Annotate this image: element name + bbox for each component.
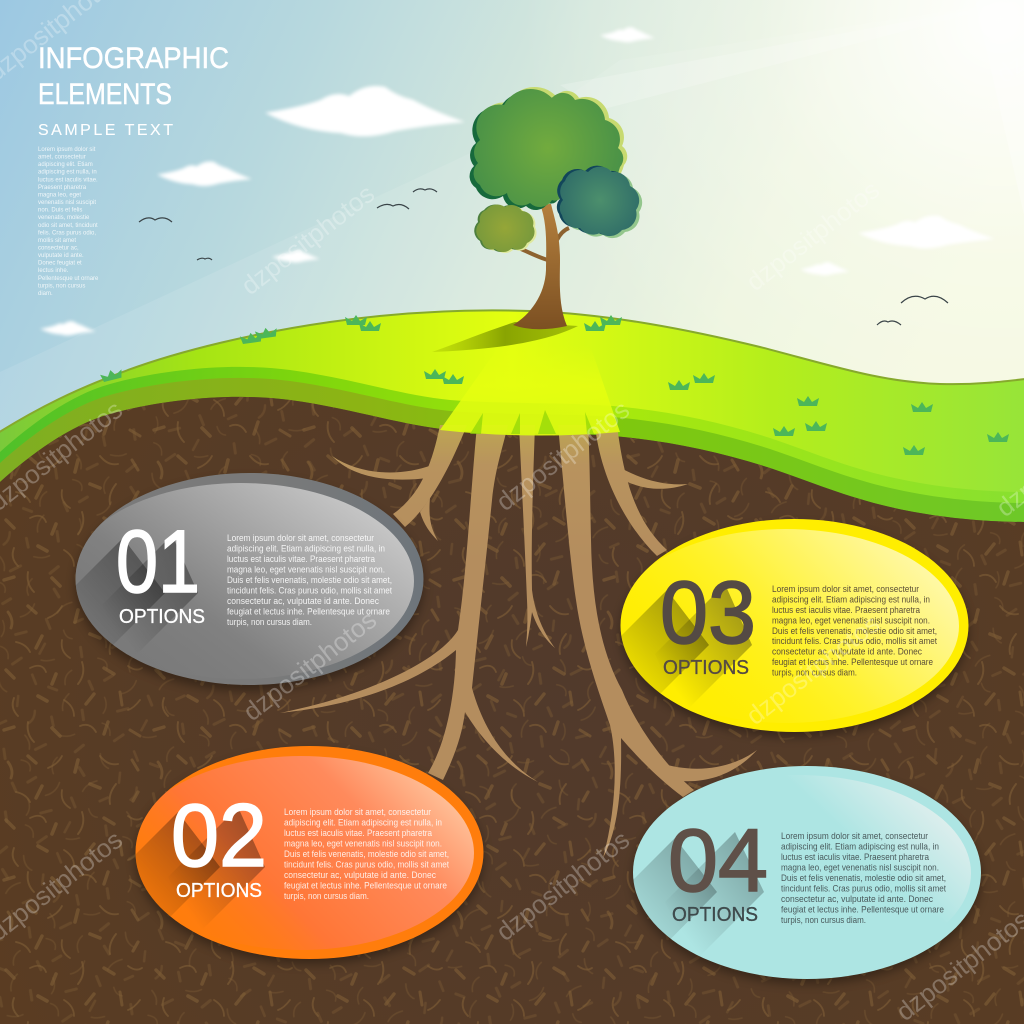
text 04: turpis, non cursus diam. <box>781 915 866 925</box>
text 01: consectetur ac, vulputate id ante. Donec <box>227 596 380 606</box>
sky paragraph: non. Duis et felis <box>38 208 82 214</box>
text 02: tincidunt felis. Cras purus odio, mollis sit amet <box>284 860 450 870</box>
text 03: feugiat et lectus inhe. Pellentesque ut ornare <box>772 657 933 667</box>
text 04: tincidunt felis. Cras purus odio, mollis sit amet <box>781 884 947 894</box>
text 03: tincidunt felis. Cras purus odio, mollis sit amet <box>772 636 938 646</box>
text 01: adipiscing elit. Etiam adipiscing est nulla, in <box>227 544 385 554</box>
text 04: luctus est iaculis vitae. Praesent pharetra <box>781 852 929 862</box>
label options 02: OPTIONS <box>176 880 262 902</box>
text 02: adipiscing elit. Etiam adipiscing est nulla, in <box>284 818 442 828</box>
sky paragraph: consectetur ac, <box>38 246 79 252</box>
text 04: adipiscing elit. Etiam adipiscing est nulla, in <box>781 842 939 852</box>
text 03: consectetur ac, vulputate id ante. Donec <box>772 647 923 657</box>
text 03: Duis et felis venenatis, molestie odio sit amet, <box>772 626 937 636</box>
sky paragraph: vulputate id ante. <box>38 253 84 259</box>
sky paragraph: Donec feugiat et <box>38 261 82 267</box>
text 03: magna leo, eget venenatis nisl suscipit non. <box>772 615 930 625</box>
sky paragraph: venenatis, molestie <box>38 215 90 221</box>
trunk and branches <box>513 204 569 329</box>
text 03: luctus est iaculis vitae. Praesent pharetra <box>772 605 920 615</box>
sky paragraph: lectus inhe. <box>38 268 69 274</box>
text 02: magna leo, eget venenatis nisl suscipit non. <box>284 838 442 848</box>
root: right main <box>558 425 757 858</box>
text 03: Lorem ipsum dolor sit amet, consectetur <box>772 584 919 594</box>
label options 04: OPTIONS <box>672 904 758 926</box>
sky paragraph: magna leo, eget <box>38 192 81 198</box>
text 03: adipiscing elit. Etiam adipiscing est nulla, in <box>772 594 930 604</box>
sky paragraph: luctus est iaculis vitae. <box>38 177 98 183</box>
text 03: turpis, non cursus diam. <box>772 667 857 677</box>
text 01: tincidunt felis. Cras purus odio, mollis sit amet <box>227 586 393 596</box>
text 03 <box>772 584 938 677</box>
olive crown <box>474 205 537 253</box>
root: left main <box>280 425 538 782</box>
tree shadow <box>432 322 578 352</box>
sky paragraph: diam. <box>38 291 53 297</box>
text 04 <box>781 831 947 925</box>
grass tufts <box>100 315 1009 455</box>
watermarks: dzpositphotos <box>490 824 635 947</box>
text 04: Lorem ipsum dolor sit amet, consectetur <box>781 831 928 841</box>
label options 01: OPTIONS <box>119 606 205 628</box>
sky paragraph: Pellentesque ut ornare <box>38 276 99 282</box>
text 01: Lorem ipsum dolor sit amet, consectetur <box>227 533 374 543</box>
option 03 panel <box>597 519 968 737</box>
sky paragraph: odio sit amet, tincidunt <box>38 223 98 229</box>
text 02: Duis et felis venenatis, molestie odio sit amet, <box>284 849 449 859</box>
text 01: feugiat et lectus inhe. Pellentesque ut ornare <box>227 606 390 616</box>
watermarks: dzpositphotos <box>237 604 382 727</box>
sky paragraph: felis. Cras purus odio, <box>38 230 96 236</box>
text 01: magna leo, eget venenatis nisl suscipit non. <box>227 564 385 574</box>
text 04: consectetur ac, vulputate id ante. Donec <box>781 894 934 904</box>
watermarks: dzpositphotos <box>740 174 885 297</box>
birds <box>139 189 948 325</box>
text 02: luctus est iaculis vitae. Praesent pharetra <box>284 828 432 838</box>
sky paragraph <box>38 147 99 297</box>
clouds <box>40 27 995 335</box>
number 01: 01 <box>116 511 200 611</box>
title block: SAMPLE TEXT <box>38 122 173 139</box>
text 02: feugiat et lectus inhe. Pellentesque ut ornare <box>284 880 447 890</box>
text 01 <box>227 533 393 627</box>
text 01: turpis, non cursus diam. <box>227 617 312 627</box>
number 03: 03 <box>660 562 756 662</box>
title block <box>38 42 229 139</box>
root: centre thin <box>519 425 555 648</box>
sky paragraph: amet, consectetur <box>38 155 86 161</box>
teal crown <box>557 166 642 238</box>
main crown <box>470 87 627 210</box>
root: far left <box>332 425 467 541</box>
text 02: consectetur ac, vulputate id ante. Donec <box>284 870 437 880</box>
text 04: magna leo, eget venenatis nisl suscipit non. <box>781 862 939 872</box>
sky paragraph: mollis sit amet <box>38 238 76 244</box>
watermarks: dzpositphotos <box>235 178 380 301</box>
option 04 panel <box>605 766 981 984</box>
sky paragraph: Praesent pharetra <box>38 185 87 191</box>
text 04: Duis et felis venenatis, molestie odio sit amet, <box>781 873 946 883</box>
tree <box>432 87 642 352</box>
title block: ELEMENTS <box>38 78 172 111</box>
sky background <box>0 0 1024 560</box>
number 04: 04 <box>668 810 768 910</box>
number 02: 02 <box>171 785 267 885</box>
watermarks: dzpositphotos <box>490 394 635 517</box>
glow above roots <box>440 345 620 436</box>
watermarks: dzpositphotos <box>740 608 885 731</box>
sky paragraph: venenatis nisl suscipit <box>38 200 96 206</box>
text 01: luctus est iaculis vitae. Praesent pharetra <box>227 554 375 564</box>
option 02 panel <box>108 746 484 964</box>
title block: INFOGRAPHIC <box>38 42 229 75</box>
sky paragraph: Lorem ipsum dolor sit <box>38 147 96 153</box>
hill <box>0 310 1024 1024</box>
text 04: feugiat et lectus inhe. Pellentesque ut ornare <box>781 904 944 914</box>
sky paragraph: turpis, non cursus <box>38 283 85 289</box>
text 02: turpis, non cursus diam. <box>284 891 369 901</box>
tree roots <box>280 425 757 858</box>
label options 03: OPTIONS <box>663 657 749 679</box>
root: far right <box>595 425 688 556</box>
soil <box>0 397 1024 1024</box>
text 01: Duis et felis venenatis, molestie odio sit amet, <box>227 575 392 585</box>
sky paragraph: adipiscing elit. Etiam <box>38 162 93 168</box>
option 01 panel <box>53 473 424 691</box>
text 02: Lorem ipsum dolor sit amet, consectetur <box>284 807 431 817</box>
text 02 <box>284 807 450 901</box>
sky paragraph: adipiscing est nulla, in <box>38 170 97 176</box>
